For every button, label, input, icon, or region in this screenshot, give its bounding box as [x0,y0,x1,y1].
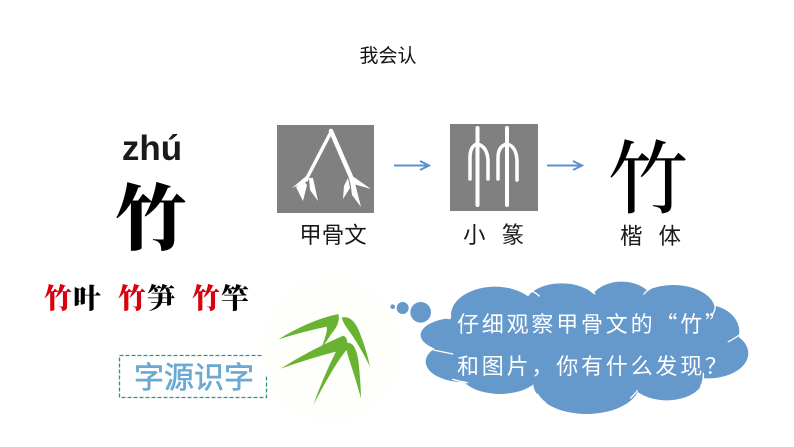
pinyin: zhu: zhú [122,129,182,168]
arrow: seal to regular [547,161,582,170]
large character: bamboo: 竹 [115,180,187,260]
title: 我会认 [359,45,417,67]
icon: bamboo leaves [262,278,398,422]
word: bamboo shoot: 竹 [118,283,146,315]
word: bamboo leaf [44,283,101,315]
word: bamboo pole: 竿 [221,283,249,315]
word: bamboo shoot: 笋 [147,283,175,315]
word: bamboo leaf: 叶 [73,283,101,315]
badge: character origin: 字源识字 [134,362,254,395]
thought bubble dots [390,302,431,323]
callout text: 仔细观察甲骨文的“竹” [457,307,730,339]
character: regular script: 竹 [608,137,688,225]
word: bamboo pole [192,283,249,315]
label: small seal script: 小篆 [463,223,540,248]
word: bamboo pole: 竹 [192,283,220,315]
callout: thought cloud [390,282,748,414]
badge: character origin [120,356,266,398]
label: regular script: 楷体 [620,224,697,249]
cloud creases [433,289,739,403]
label: oracle bone script: 甲骨文 [299,223,367,248]
panel: small seal script [450,124,538,211]
callout text: 和图片，你有什么发现？ [457,349,730,381]
arrow: oracle to seal [394,161,429,170]
word: bamboo leaf: 竹 [44,283,72,315]
panel: oracle bone script [277,125,374,213]
word: bamboo shoot [118,283,175,315]
cloud body [421,282,748,414]
